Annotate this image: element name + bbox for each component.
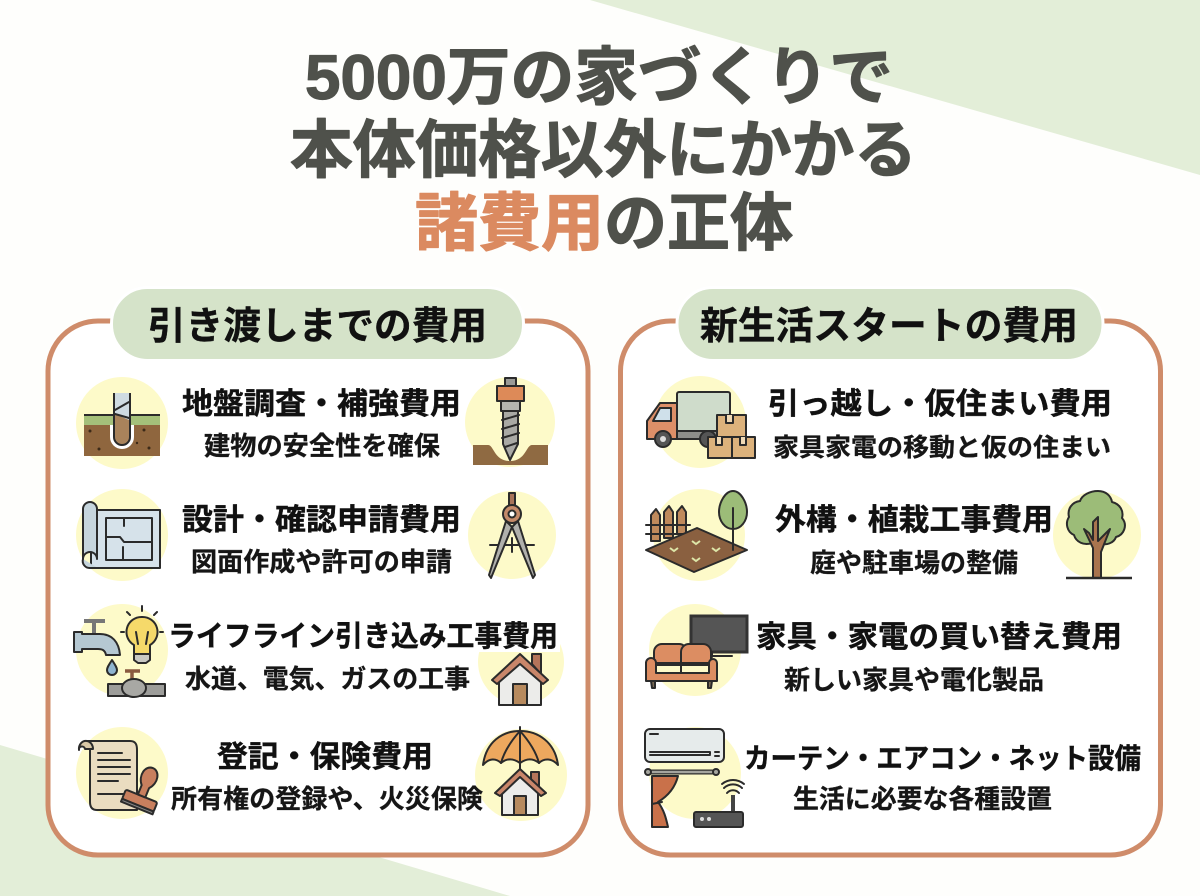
item text bbox=[168, 618, 560, 694]
item text: 家具家電の移動と仮の住まい bbox=[773, 434, 1111, 462]
panel heading bbox=[677, 288, 1103, 360]
item: design and application bbox=[76, 489, 556, 581]
item text bbox=[756, 621, 1122, 695]
item text: 登記・保険費用 bbox=[217, 741, 433, 774]
icon: truck and boxes bbox=[647, 376, 755, 468]
item: furniture and appliances bbox=[646, 604, 1122, 696]
item text: カーテン・エアコン・ネット設備 bbox=[744, 743, 1141, 774]
item text: 地盤調査・補強費用 bbox=[182, 388, 461, 421]
icon: tree bbox=[1053, 491, 1141, 579]
item text bbox=[182, 388, 461, 461]
icon: umbrella over house bbox=[475, 727, 567, 821]
icon: water, power, gas bbox=[74, 604, 168, 697]
item: lifeline connection bbox=[74, 604, 564, 705]
title bbox=[290, 43, 917, 259]
icon: sofa and tv bbox=[646, 604, 747, 696]
panel heading: 新生活スタートの費用 bbox=[700, 306, 1078, 348]
item text: 水道、電気、ガスの工事 bbox=[185, 664, 470, 694]
item text: 生活に必要な各種設置 bbox=[793, 784, 1052, 814]
item text bbox=[744, 743, 1141, 814]
item text bbox=[768, 388, 1112, 462]
title: 諸費用の正体 bbox=[415, 189, 793, 259]
item: curtain, AC, network bbox=[645, 727, 1141, 827]
panel frame bbox=[620, 321, 1160, 855]
item text: 引っ越し・仮住まい費用 bbox=[768, 388, 1112, 421]
item text: ライフライン引き込み工事費用 bbox=[168, 620, 558, 653]
item text bbox=[775, 504, 1053, 578]
icon: compass bbox=[468, 491, 556, 579]
icon: blueprint bbox=[76, 489, 168, 581]
item: moving bbox=[647, 376, 1112, 468]
icon: deed and stamp bbox=[76, 727, 169, 819]
item text: 設計・確認申請費用 bbox=[182, 504, 461, 537]
item: exterior and planting bbox=[646, 489, 1141, 581]
item text: 家具・家電の買い替え費用 bbox=[756, 621, 1122, 654]
panel heading bbox=[112, 288, 524, 360]
title: 本体価格以外にかかる bbox=[290, 116, 917, 186]
icon: soil boring bbox=[76, 377, 168, 469]
title: 5000万の家づくりで bbox=[305, 43, 893, 113]
item: ground survey bbox=[76, 377, 555, 469]
item text: 建物の安全性を確保 bbox=[204, 431, 440, 461]
item text: 新しい家具や電化製品 bbox=[784, 665, 1044, 695]
item text: 外構・植栽工事費用 bbox=[775, 504, 1053, 537]
panel frame bbox=[48, 321, 588, 855]
icon: drill bbox=[465, 377, 555, 467]
icon: garden bbox=[646, 489, 747, 581]
item: registration and insurance bbox=[76, 727, 567, 821]
item text bbox=[182, 504, 461, 577]
item text bbox=[171, 741, 483, 814]
panel: costs until handover bbox=[48, 288, 588, 855]
icon: house bbox=[478, 619, 564, 705]
icon: AC, curtain, router bbox=[645, 727, 744, 827]
item text: 庭や駐車場の整備 bbox=[810, 548, 1018, 578]
item text: 所有権の登録や、火災保険 bbox=[171, 784, 483, 814]
panel heading: 引き渡しまでの費用 bbox=[148, 306, 487, 348]
panel: costs for starting new life bbox=[620, 288, 1160, 855]
item text: 図面作成や許可の申請 bbox=[191, 547, 452, 577]
